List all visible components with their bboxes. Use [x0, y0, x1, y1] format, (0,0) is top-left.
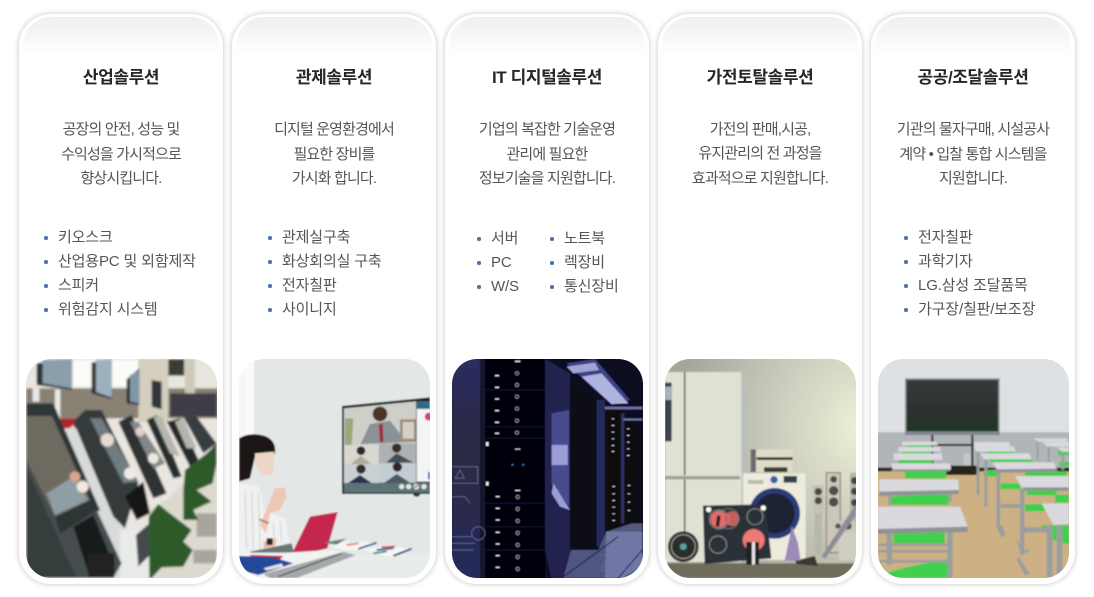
panel: 공공/조달솔루션 [871, 14, 1075, 584]
list: 관제솔루션 항목 [268, 229, 382, 318]
text: 관제솔루션 설명: 디지털 운영환경에서 [274, 121, 394, 138]
list: IT 디지털솔루션 항목 2 [550, 230, 619, 295]
heading: IT 디지털솔루션: IT 디지털솔루션 [492, 68, 602, 87]
text: 공공/조달솔루션 설명: 기관의 물자구매, 시설공사 [897, 121, 1049, 138]
text: 관제솔루션 설명: 가시화 합니다. [292, 170, 376, 187]
text: 공공/조달솔루션 설명: 계약 • 입찰 통합 시스템을 [899, 146, 1047, 162]
heading: 가전토탈솔루션: 가전토탈솔루션 [707, 68, 813, 87]
list: 공공/조달솔루션 항목: LG.삼성 조달품목 [918, 277, 1028, 294]
panel: IT 디지털솔루션 [445, 14, 649, 584]
list: IT 디지털솔루션 항목 2: 통신장비 [564, 278, 619, 295]
photo: video conference [239, 359, 430, 578]
text: 공공/조달솔루션 설명 [897, 121, 1050, 187]
list: IT 디지털솔루션 항목 1 [477, 230, 519, 295]
text: 산업솔루션 설명: 향상시킵니다. [80, 170, 162, 187]
text: 관제솔루션 설명 [274, 121, 394, 187]
text: 산업솔루션 설명: 수익성을 가시적으로 [61, 146, 181, 162]
list: IT 디지털솔루션 항목 2: 노트북 [564, 230, 605, 247]
list: 관제솔루션 항목: 관제실구축 [282, 229, 350, 246]
panel: 산업솔루션 [19, 14, 223, 584]
photo: server room [452, 359, 643, 578]
panel: 관제솔루션 [232, 14, 436, 584]
text: 관제솔루션 설명: 필요한 장비를 [293, 146, 375, 162]
text: 가전토탈솔루션 설명 [692, 120, 828, 186]
heading: 공공/조달솔루션: 공공/조달솔루션 [917, 68, 1028, 87]
list: 관제솔루션 항목: 화상회의실 구축 [282, 253, 382, 270]
list: 관제솔루션 항목: 사이니지 [282, 301, 337, 318]
list: 공공/조달솔루션 항목: 가구장/칠판/보조장 [918, 301, 1035, 318]
text: IT 디지털솔루션 설명: 정보기술을 지원합니다. [479, 170, 615, 187]
list: IT 디지털솔루션 항목 1: PC [491, 254, 512, 271]
list: 산업솔루션 항목 [44, 229, 196, 318]
panel: 가전토탈솔루션 [658, 14, 862, 584]
list: IT 디지털솔루션 항목 1: W/S [491, 278, 519, 295]
list: 산업솔루션 항목: 키오스크 [58, 229, 113, 246]
list: 공공/조달솔루션 항목 [904, 229, 1035, 318]
list: 산업솔루션 항목: 산업용PC 및 외함제작 [58, 253, 196, 270]
list: 관제솔루션 항목: 전자칠판 [282, 277, 337, 294]
text: IT 디지털솔루션 설명: 기업의 복잡한 기술운영 [479, 121, 615, 138]
photo: kiosks [26, 359, 217, 578]
text: IT 디지털솔루션 설명 [479, 121, 615, 187]
text: IT 디지털솔루션 설명: 관리에 필요한 [506, 146, 588, 162]
list: 산업솔루션 항목: 스피커 [58, 277, 99, 294]
text: 산업솔루션 설명 [61, 121, 182, 187]
text: 산업솔루션 설명: 공장의 안전, 성능 및 [63, 121, 179, 138]
heading: 관제솔루션: 관제솔루션 [296, 68, 372, 87]
text: 가전토탈솔루션 설명: 효과적으로 지원합니다. [692, 170, 828, 186]
list: 산업솔루션 항목: 위험감지 시스템 [58, 301, 158, 318]
photo: classroom [878, 359, 1069, 578]
list: IT 디지털솔루션 항목 2: 렉장비 [564, 254, 605, 271]
photo: home appliances [665, 359, 856, 578]
list: 공공/조달솔루션 항목: 전자칠판 [918, 229, 973, 246]
text: 가전토탈솔루션 설명: 유지관리의 전 과정을 [698, 145, 822, 162]
list: IT 디지털솔루션 항목 1: 서버 [491, 230, 518, 247]
text: 가전토탈솔루션 설명: 가전의 판매,시공, [710, 120, 810, 138]
heading: 산업솔루션: 산업솔루션 [83, 68, 159, 87]
list: 공공/조달솔루션 항목: 과학기자 [918, 253, 973, 270]
text: 공공/조달솔루션 설명: 지원합니다. [939, 170, 1007, 187]
